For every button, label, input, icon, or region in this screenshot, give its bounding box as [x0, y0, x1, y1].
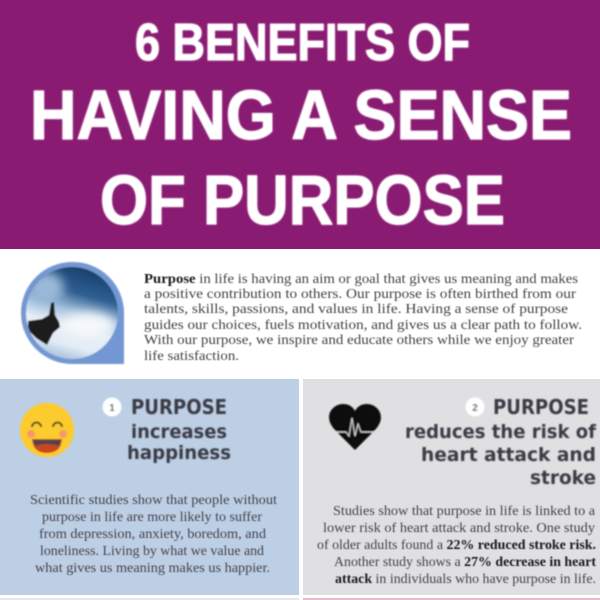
- icon: smiling emoji: [20, 403, 74, 457]
- body 1: what gives us meaning makes us happier.: [35, 560, 270, 575]
- title banner: [0, 0, 600, 249]
- body 2: [317, 503, 597, 586]
- heading 2: stroke: [530, 467, 596, 489]
- intro text: [144, 271, 582, 363]
- icon: heart with pulse: [329, 404, 381, 450]
- panel 2: heart: [303, 379, 600, 595]
- intro text: a positive contribution to others. Our purpose is often birthed from our: [144, 286, 577, 301]
- intro text: talents, skills, passions, and values in life. Having a sense of purpose: [144, 301, 568, 316]
- next panel edges: [0, 598, 600, 600]
- heading 2: heart attack and: [421, 444, 596, 466]
- body 2: Studies show that purpose in life is linked to a: [333, 503, 595, 518]
- body 2: attack in individuals who have purpose in life.: [335, 571, 596, 586]
- body 2: of older adults found a 22% reduced stroke risk.: [317, 537, 596, 552]
- heading 2: PURPOSE: [493, 395, 589, 419]
- intro text: life satisfaction.: [144, 348, 239, 363]
- heading 1: PURPOSE: [131, 395, 227, 419]
- badge 2: [466, 398, 484, 416]
- heading 1: [127, 395, 231, 464]
- heading 1: increases: [131, 421, 227, 443]
- image: person on cliff in teardrop frame: [21, 262, 124, 364]
- body 1: Scientific studies show that people without: [30, 492, 277, 507]
- panel 1: happiness: [0, 379, 299, 595]
- badge 1: 1: [109, 403, 115, 414]
- intro text: With our purpose, we inspire and educate others while we enjoy greater: [144, 332, 575, 347]
- title line 3: OF PURPOSE: [100, 161, 505, 239]
- body 1: purpose in life are more likely to suffer: [42, 509, 263, 524]
- body 2: Another study shows a 27% decrease in heart: [334, 554, 597, 569]
- intro text: Purpose in life is having an aim or goal that gives us meaning and makes: [144, 271, 578, 286]
- body 1: [30, 492, 277, 575]
- heading 1: happiness: [127, 442, 231, 464]
- heading 2: [405, 395, 597, 489]
- badge 2: 2: [472, 403, 478, 414]
- title line 1: 6 BENEFITS OF: [135, 14, 470, 72]
- body 2: lower risk of heart attack and stroke. One study: [323, 520, 595, 535]
- body 1: from depression, anxiety, boredom, and: [39, 526, 266, 541]
- badge 1: [102, 398, 122, 416]
- body 1: loneliness. Living by what we value and: [40, 543, 264, 558]
- intro text: guides our choices, fuels motivation, and gives us a clear path to follow.: [144, 317, 582, 332]
